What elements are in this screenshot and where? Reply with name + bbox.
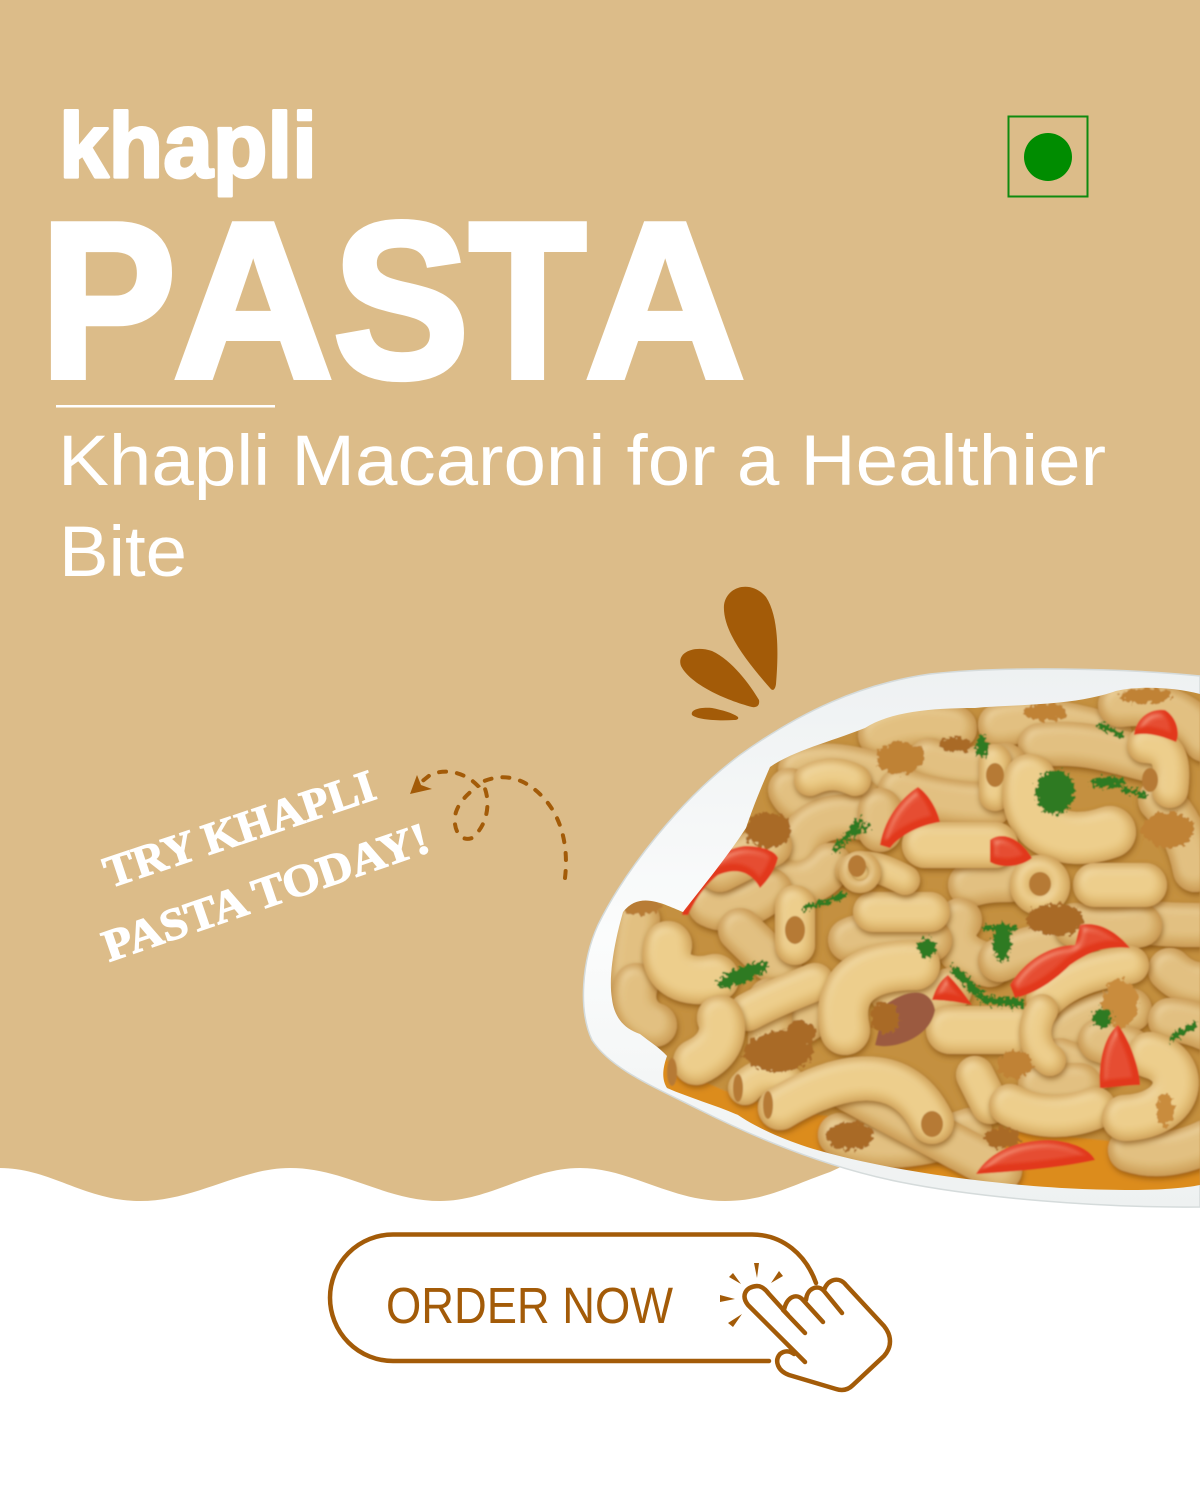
callout: try khapli pasta today: PASTA TODAY! xyxy=(96,813,436,971)
callout: try khapli pasta today xyxy=(96,760,436,971)
orange sauce pool xyxy=(663,1060,1200,1190)
tomato pieces xyxy=(682,710,1178,1174)
icon: vegetarian mark xyxy=(1008,116,1088,196)
button label: ORDER NOW xyxy=(386,1277,673,1334)
subtitle: Khapli Macaroni for a Healthier xyxy=(58,422,1106,501)
main title: PASTA: T xyxy=(469,176,586,424)
main title: PASTA xyxy=(40,176,745,425)
icon: splash accent xyxy=(680,587,777,720)
divider under title xyxy=(56,405,275,408)
dish: plate of macaroni xyxy=(583,669,1200,1207)
front layer pasta xyxy=(667,745,1176,1122)
button: order now xyxy=(330,1234,890,1390)
food xyxy=(590,670,1200,1200)
sauce base xyxy=(590,670,1200,1200)
arrow: dashed looping arrow xyxy=(410,772,566,878)
pasta openings xyxy=(667,763,1158,1137)
main title: PASTA: P xyxy=(40,177,176,425)
brand word: khapli: khapli xyxy=(59,95,317,197)
main title: PASTA: S xyxy=(333,177,469,425)
subtitle xyxy=(58,422,1106,592)
main title: PASTA: A xyxy=(585,177,745,425)
button outline xyxy=(330,1234,816,1361)
meat crumbs xyxy=(620,688,1194,1150)
plate xyxy=(583,669,1200,1207)
main title: PASTA: A xyxy=(173,177,333,425)
icon: clicking hand xyxy=(720,1263,890,1390)
back layer pasta xyxy=(631,704,1200,1170)
callout: try khapli pasta today: TRY KHAPLI xyxy=(97,760,382,897)
parsley xyxy=(713,725,1195,1038)
subtitle: Bite xyxy=(59,513,187,592)
